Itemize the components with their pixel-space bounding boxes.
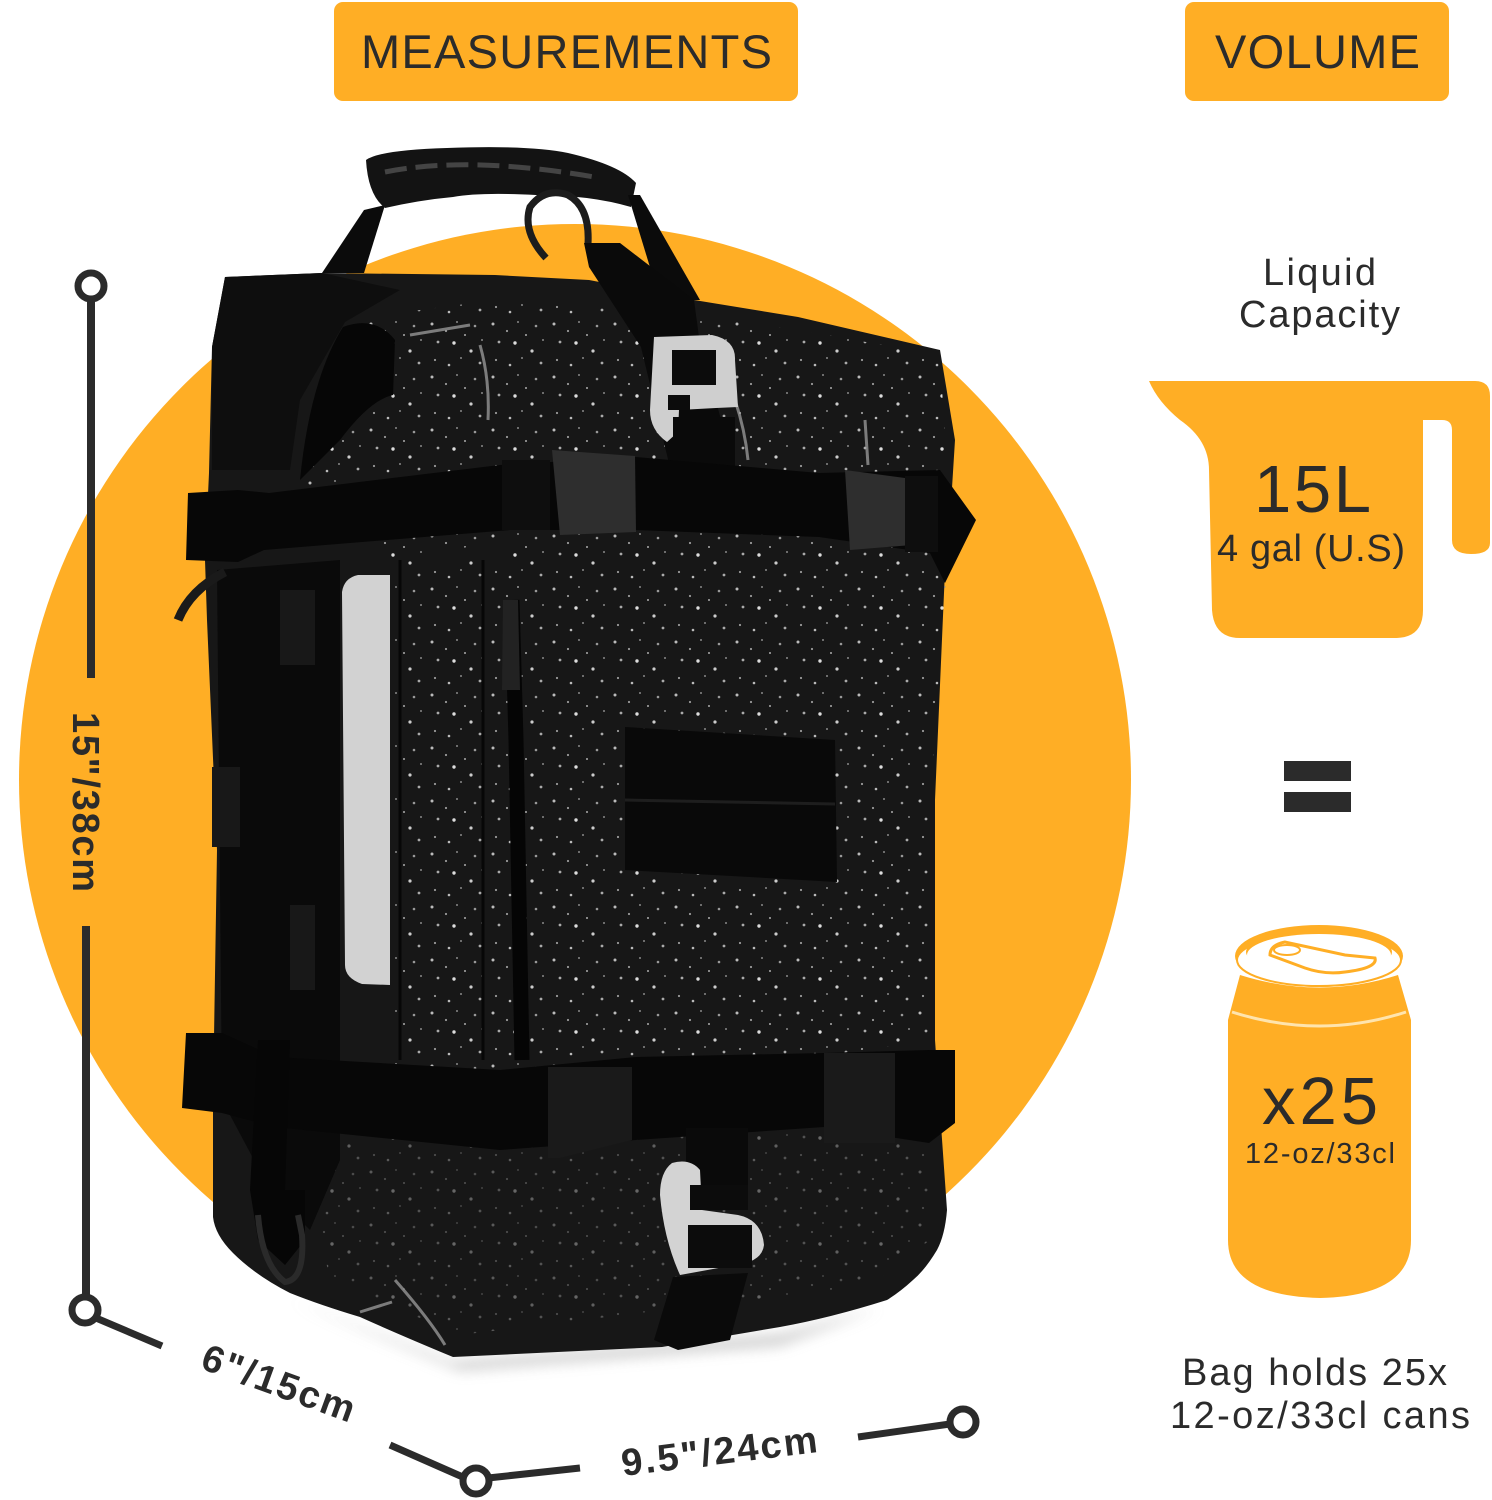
label: liquid capacity (1239, 252, 1400, 336)
caption: can count: 12-oz/33cl cans (1170, 1395, 1470, 1437)
depth dimension: 6"/15cm (196, 1337, 361, 1431)
top buckles (552, 450, 636, 535)
bottom horizontal strap (182, 1033, 955, 1150)
heading: volume (1185, 2, 1449, 101)
heading: volume: VOLUME (1215, 25, 1420, 78)
icon: measuring jug with capacity (1149, 381, 1490, 638)
metal buckle top (650, 335, 738, 442)
icon: drink can with count: x25 (1262, 1064, 1378, 1139)
icon: measuring jug with capacity: 15L (1254, 452, 1371, 527)
icon: equals sign (1284, 761, 1351, 812)
caption: can count (1170, 1352, 1470, 1437)
roll-top fold (212, 273, 400, 470)
bottom buckles (548, 1067, 632, 1158)
width dimension (488, 1409, 976, 1485)
bag body (205, 273, 955, 1357)
width dimension: 9.5"/24cm (619, 1419, 820, 1485)
heading: measurements (334, 2, 798, 101)
caption: can count: Bag holds 25x (1182, 1352, 1447, 1394)
carry handle (322, 147, 700, 300)
heading: measurements: MEASUREMENTS (361, 25, 772, 78)
zipper (512, 600, 522, 1060)
icon: drink can with count: 12-oz/33cl (1245, 1138, 1395, 1170)
top horizontal strap (186, 457, 976, 583)
D-ring (528, 193, 588, 258)
icon: drink can with count (1228, 925, 1411, 1298)
height dimension (64, 273, 106, 1323)
label: liquid capacity: Capacity (1239, 294, 1400, 336)
label: liquid capacity: Liquid (1263, 252, 1376, 294)
side strap (250, 1040, 305, 1265)
side tabs (212, 590, 315, 990)
floor shadow (290, 1300, 880, 1370)
metal buckle bottom (660, 1162, 764, 1275)
bottom vertical strap (686, 1128, 748, 1190)
velcro patch (625, 727, 837, 882)
droplets (300, 300, 950, 1100)
reflective strip (342, 575, 390, 985)
background circle (19, 224, 1131, 1336)
height dimension: 15"/38cm (64, 712, 106, 892)
water streaks (360, 325, 868, 1345)
dark side panel (217, 560, 340, 1230)
lower side ring (258, 1215, 302, 1282)
depth dimension (96, 1318, 489, 1494)
icon: measuring jug with capacity: 4 gal (U.S) (1217, 528, 1405, 570)
top webbing strap (584, 243, 737, 480)
product photo: waterproof backpack (178, 147, 976, 1370)
zip pull (502, 600, 520, 690)
side D-ring (178, 572, 225, 620)
